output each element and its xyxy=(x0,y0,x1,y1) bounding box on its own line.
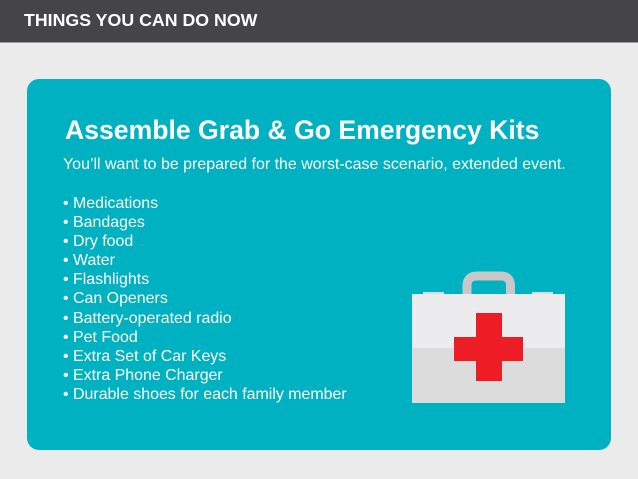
header bar xyxy=(0,0,638,43)
checklist: • Extra Phone Charger xyxy=(63,367,223,384)
checklist: • Dry food xyxy=(63,233,133,250)
checklist: • Water xyxy=(63,252,115,269)
checklist: • Pet Food xyxy=(63,329,138,346)
checklist: • Durable shoes for each family member xyxy=(63,386,347,403)
intro text: You’ll want to be prepared for the worst-case scenario, extended event. xyxy=(63,156,566,173)
icon: first aid kit xyxy=(412,272,565,403)
checklist: • Medications xyxy=(63,195,158,212)
checklist: • Battery-operated radio xyxy=(63,310,232,327)
checklist: • Bandages xyxy=(63,214,145,231)
checklist xyxy=(63,195,347,403)
checklist: • Extra Set of Car Keys xyxy=(63,348,226,365)
header title: THINGS YOU CAN DO NOW xyxy=(24,10,257,30)
panel: emergency kits xyxy=(27,79,611,450)
panel heading: Assemble Grab & Go Emergency Kits xyxy=(65,115,539,145)
checklist: • Can Openers xyxy=(63,290,168,307)
checklist: • Flashlights xyxy=(63,271,149,288)
